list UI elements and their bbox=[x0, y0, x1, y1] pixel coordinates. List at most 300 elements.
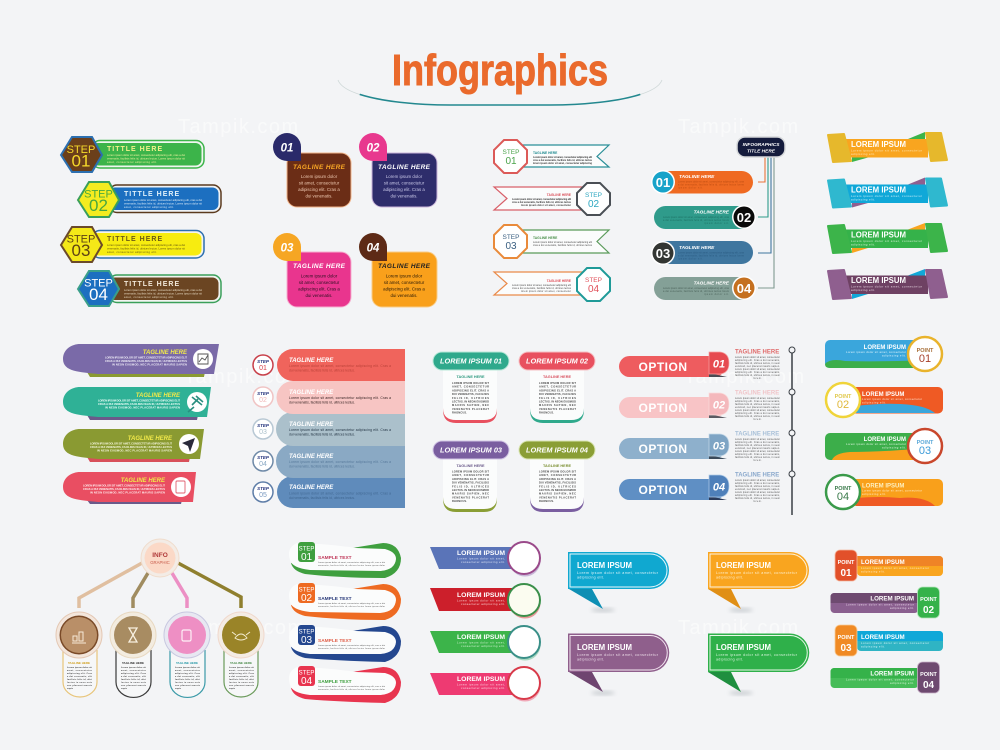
point 04: LOREM IPSUM bbox=[862, 484, 904, 490]
tagline bar red: LOREM IPSUM DOLOR SIT AMET, CONSECTETUR ADIPISCING ELIT bbox=[83, 484, 165, 488]
text card 04: LECTUS. IN NEON EUISMOD bbox=[539, 488, 576, 492]
option 01: adipiscing elit. Cras a dui venenatis, bbox=[735, 371, 780, 374]
row 05: 05 bbox=[259, 492, 267, 499]
option 03: TAGLINE HERE bbox=[735, 432, 779, 438]
tab 03: Lorem ipsum dolor sit amet, consectetur bbox=[861, 641, 929, 645]
text card 02: TAGLINE HERE bbox=[543, 375, 571, 379]
pill 03: Lorem ipsum dolor sit amet, consectetur adipiscing elit, cras bbox=[678, 252, 745, 254]
tagline bar teal: TAGLINE HERE bbox=[136, 393, 181, 399]
swoosh 04 bbox=[289, 666, 401, 703]
point 01: adipiscing elit. bbox=[882, 354, 906, 358]
callout blue: adipiscing elit. bbox=[577, 576, 604, 580]
point 04: 04 bbox=[837, 491, 849, 503]
callout green: LOREM IPSUM bbox=[716, 643, 771, 652]
text card 03 bbox=[433, 441, 509, 512]
point 04: adipiscing elit. bbox=[862, 492, 886, 496]
option 01: facilisis felis id, ultrices lectus, in neon bbox=[735, 374, 781, 377]
row 02: 02 bbox=[259, 397, 267, 404]
option 02: adipiscing elit. Cras a dui venenatis, bbox=[735, 400, 780, 403]
card 01: 01 bbox=[281, 142, 293, 154]
ribbon 01: cras a dui venenatis, facilisis felis id, ultrices lectus bbox=[533, 159, 593, 162]
tab 04 bbox=[830, 662, 940, 693]
tagline bar purple: IN NEON EUISMOD, NEC PLACERAT MAURIS SAPIEN bbox=[112, 362, 187, 366]
ribbon circle 3 bbox=[430, 626, 540, 660]
tree card 2: TAGLINE HERE bbox=[122, 661, 144, 665]
row 02: dui venenatis, facilisis felis id, ultrices lectus. bbox=[289, 400, 355, 404]
point 03: 03 bbox=[919, 445, 931, 457]
pill 02: ipsum dolor sit. bbox=[704, 222, 729, 225]
title pill bbox=[737, 137, 785, 157]
step 02: STEP bbox=[84, 188, 113, 200]
ribbon 01 bbox=[494, 140, 609, 173]
ribbon circle 1: LOREM IPSUM bbox=[457, 550, 505, 557]
card 04: dui venenatis. bbox=[390, 293, 418, 298]
ribbon 01: 01 bbox=[505, 156, 517, 167]
tab 01: POINT bbox=[838, 560, 855, 566]
text card 01: DUI VENENATIS, FACILISIS bbox=[452, 392, 489, 396]
pill 03: ipsum dolor sit. bbox=[678, 258, 703, 260]
ribbon 03: Lorem ipsum dolor sit amet, consectetur adipiscing elit bbox=[533, 241, 592, 244]
row 01: Lorem ipsum dolor sit amet, consectetur adipiscing elit. Cras a bbox=[289, 364, 391, 368]
tab 04: LOREM IPSUM bbox=[870, 670, 914, 678]
connectors bbox=[79, 563, 241, 608]
tree card 1: a dui venenatis, elit bbox=[67, 675, 92, 678]
card 02: TAGLINE HERE bbox=[378, 164, 431, 171]
option 04: lorem. bbox=[753, 500, 762, 503]
card 02: adipiscing elit. Cras a bbox=[383, 187, 425, 192]
step 01: amet, consectetur adipiscing elit. bbox=[107, 160, 157, 164]
card 04: adipiscing elit. Cras a bbox=[383, 286, 425, 292]
option 03: 03 bbox=[713, 440, 725, 452]
pill 04: TAGLINE HERE bbox=[694, 280, 730, 286]
swoosh 04: 04 bbox=[301, 676, 312, 687]
row 04: STEP bbox=[257, 455, 270, 460]
tagline bar teal: CRAS A DUI VENENATIS, FACILISIS FELIS ID, ULTRICES LECTUS bbox=[98, 402, 180, 406]
option 02: Lorem ipsum dolor sit amet, consectetur bbox=[735, 409, 780, 412]
point 01: LOREM IPSUM bbox=[864, 345, 906, 351]
pill 02: a dui venenatis, facilisis felis id, ultrices lectus lorem bbox=[663, 219, 729, 222]
text card 04: TAGLINE HERE bbox=[543, 464, 571, 468]
step 01: 01 bbox=[72, 152, 90, 170]
swoosh 02: venenatis, facilisis felis id, ultrices lectus lorem ipsum dolor bbox=[318, 605, 385, 608]
pill 03: 03 bbox=[656, 246, 670, 261]
row 01: STEP bbox=[257, 359, 270, 364]
point 03 bbox=[825, 429, 942, 463]
text card 01: AMET, CONSECTETUR bbox=[452, 385, 489, 389]
point 01 bbox=[825, 337, 942, 371]
ribbon 03 bbox=[494, 225, 609, 258]
pill 02: 02 bbox=[737, 210, 751, 225]
option 03: facilisis felis id, ultrices lectus, in neon bbox=[735, 456, 781, 459]
tree card 4: facilisis felis id, ultri bbox=[229, 678, 254, 681]
option 01: TAGLINE HERE bbox=[735, 350, 779, 356]
card 04: TAGLINE HERE bbox=[378, 263, 431, 270]
option 03: Lorem ipsum dolor sit amet, consectetur bbox=[735, 438, 780, 441]
tree card 4: lectus in neon euis bbox=[229, 681, 255, 684]
point 02: Lorem ipsum dolor sit amet, consectetur bbox=[862, 397, 922, 401]
pill 02: TAGLINE HERE bbox=[694, 210, 730, 216]
step 01 bbox=[61, 137, 204, 172]
row 01: 01 bbox=[259, 365, 267, 372]
row 01: dui venenatis, facilisis felis id, ultrices lectus. bbox=[289, 368, 355, 372]
ribbon 03: 03 bbox=[505, 241, 517, 252]
tab 03: adipiscing elit. bbox=[861, 644, 885, 648]
pill 01: 01 bbox=[656, 175, 670, 190]
timeline axis bbox=[789, 347, 795, 515]
tree card 3: nec placerat mauris bbox=[175, 684, 201, 687]
text card 02: DUI VENENATIS, FACILISIS bbox=[539, 392, 576, 396]
ribbon 01: TAGLINE HERE bbox=[533, 151, 558, 155]
step 01: Lorem ipsum dolor sit amet, consectetur adipiscing elit, cras a dui bbox=[107, 153, 185, 157]
tree card 1: amet, consectetur bbox=[67, 669, 92, 672]
step 04: TITTLE HERE bbox=[124, 281, 180, 288]
row 05: TAGLINE HERE bbox=[289, 485, 334, 491]
option 02: facilisis felis id, ultrices lectus, in neon bbox=[735, 403, 781, 406]
pill 01: ipsum dolor sit. bbox=[678, 186, 703, 190]
pill 01: a dui venenatis, facilisis felis id, ultrices lectus lorem bbox=[678, 184, 744, 186]
tab 01: 01 bbox=[840, 568, 852, 579]
ribbon circle 4 bbox=[430, 667, 540, 702]
tagline bar olive: IN NEON EUISMOD, NEC PLACERAT MAURIS SAPIEN bbox=[97, 448, 172, 452]
tree card 4: amet, consectetur bbox=[229, 669, 254, 672]
banner 1 bbox=[828, 132, 947, 162]
point 01: POINT bbox=[917, 348, 934, 354]
panel: stacked steps bbox=[253, 349, 405, 508]
swoosh 03: 03 bbox=[301, 635, 312, 646]
card 04: 04 bbox=[367, 242, 380, 254]
text card 02: FELIS ID, ULTRICES bbox=[539, 396, 576, 400]
banner 3: LOREM IPSUM bbox=[851, 230, 906, 240]
step 03: STEP bbox=[67, 234, 95, 246]
banner 1: adipiscing elit. bbox=[851, 152, 875, 156]
tree card 1: sapie bbox=[67, 688, 74, 690]
ribbon 04: lorem ipsum dolor sit amet, consectetur bbox=[521, 290, 571, 293]
step 04: venenatis, facilisis felis id, ultrices lectus. Lorem ipsum dolor sit bbox=[124, 292, 202, 296]
text card 02: VENENATIS PLACERAT bbox=[539, 407, 576, 411]
panel: tagline cards bbox=[273, 133, 437, 307]
pill 04: 04 bbox=[737, 281, 752, 296]
text card 03: VENENATIS PLACERAT bbox=[452, 495, 489, 499]
ribbon circle 1: Lorem ipsum dolor sit amet, bbox=[457, 556, 505, 560]
card 02: dui venenatis. bbox=[390, 194, 418, 198]
text card 04: DUI VENENATIS, FACILISIS bbox=[539, 481, 576, 485]
panel: speech callouts bbox=[568, 552, 809, 695]
step 02: Lorem ipsum dolor sit amet, consectetur adipiscing elit, cras a dui bbox=[124, 198, 202, 202]
tab 01 bbox=[835, 550, 943, 581]
pill 04: ipsum dolor sit. bbox=[704, 293, 729, 296]
option 04: facilisis felis id, ultrices lectus, in neon bbox=[735, 485, 781, 488]
row 05: STEP bbox=[257, 486, 270, 491]
pill 03: TAGLINE HERE bbox=[679, 245, 715, 251]
tab 01: LOREM IPSUM bbox=[861, 559, 905, 566]
text card 01: MAURIS SAPIEN, NEC bbox=[452, 403, 489, 407]
ribbon circle 2 bbox=[430, 584, 540, 618]
tagline bar purple: LOREM IPSUM DOLOR SIT AMET, CONSECTETUR ADIPISCING ELIT bbox=[105, 356, 187, 360]
tree card 2: nec placerat mauris bbox=[121, 684, 147, 687]
point 03: adipiscing elit. bbox=[882, 446, 906, 450]
watermarks bbox=[178, 116, 806, 639]
option 03: adipiscing elit. Cras a dui venenatis, bbox=[735, 441, 780, 444]
tree card 2: adipiscing elit. Cras bbox=[121, 672, 147, 675]
tree card 2: facilisis felis id, ultri bbox=[121, 678, 146, 681]
pill 03 bbox=[651, 241, 753, 265]
card 04 bbox=[359, 233, 437, 307]
step 01: TITTLE HERE bbox=[107, 146, 163, 153]
card 02: Lorem ipsum dolor bbox=[386, 174, 423, 179]
banner 4 bbox=[828, 269, 947, 299]
row 04: Lorem ipsum dolor sit amet, consectetur adipiscing elit. Cras a bbox=[289, 460, 391, 464]
title bbox=[338, 46, 662, 105]
swoosh 02: 02 bbox=[301, 593, 312, 604]
card 01: dui venenatis. bbox=[305, 194, 333, 198]
card 03: sit amet, consectetur bbox=[299, 280, 340, 285]
tagline bar teal: LOREM IPSUM DOLOR SIT AMET, CONSECTETUR ADIPISCING ELIT bbox=[98, 398, 180, 402]
panel: lorem ipsum text cards bbox=[433, 352, 595, 512]
text card 04: LOREM IPSUM DOLOR SIT bbox=[539, 470, 576, 474]
row 01 bbox=[253, 349, 405, 381]
option 01: 01 bbox=[713, 358, 725, 370]
tree card 2: sapie bbox=[121, 688, 128, 690]
point 03: Lorem ipsum dolor sit amet, consectetur bbox=[846, 442, 906, 446]
option 04: euismod, nec placerat mauris sapien. bbox=[735, 488, 780, 491]
row 05 bbox=[253, 476, 405, 508]
step 01: venenatis, facilisis felis id, ultrices lectus. Lorem ipsum dolor sit bbox=[107, 156, 185, 160]
tree card 3: Lorem ipsum dolor sit bbox=[175, 666, 200, 669]
step 03 bbox=[61, 227, 204, 262]
tree card 3: amet, consectetur bbox=[175, 669, 200, 672]
card 01 bbox=[273, 133, 351, 207]
callout blue bbox=[568, 552, 669, 612]
panel: option timeline bbox=[619, 347, 795, 515]
tree card 1: lectus in neon euis bbox=[67, 681, 93, 684]
card 02 bbox=[359, 133, 437, 207]
panel: ribbon circles bbox=[430, 542, 540, 702]
text card 03: LOREM IPSUM 03 bbox=[440, 448, 502, 454]
ribbon circle 2: Lorem ipsum dolor sit amet, bbox=[457, 598, 505, 602]
ribbon circle 2: consectetur adipiscing elit. bbox=[461, 602, 505, 606]
callout purple bbox=[568, 634, 669, 695]
option 02: 02 bbox=[713, 400, 725, 412]
tree card 1: nec placerat mauris bbox=[67, 684, 93, 687]
callout blue: LOREM IPSUM bbox=[577, 561, 632, 570]
text card 04 bbox=[519, 441, 595, 512]
text card 02: AMET, CONSECTETUR bbox=[539, 385, 576, 389]
card 01: Lorem ipsum dolor bbox=[301, 174, 338, 179]
point 01: Lorem ipsum dolor sit amet, consectetur bbox=[846, 350, 906, 354]
option 03 bbox=[619, 432, 781, 462]
tab 01: Lorem ipsum dolor sit amet, consectetur bbox=[861, 566, 929, 570]
callout orange: LOREM IPSUM bbox=[716, 561, 771, 570]
text card 02: MAURIS SAPIEN, NEC bbox=[539, 403, 576, 407]
row 03: dui venenatis, facilisis felis id, ultrices lectus. bbox=[289, 432, 355, 436]
watermarks: Tampik.com bbox=[684, 366, 806, 388]
row 05: Lorem ipsum dolor sit amet, consectetur adipiscing elit. Cras a bbox=[289, 492, 391, 496]
pill 01: TAGLINE HERE bbox=[679, 174, 715, 180]
banner 2 bbox=[828, 178, 947, 208]
tab 02 bbox=[830, 587, 940, 618]
step 03: Lorem ipsum dolor sit amet, consectetur adipiscing elit, cras a dui bbox=[107, 243, 185, 247]
callout orange bbox=[708, 552, 809, 612]
watermarks: Tampik.com bbox=[178, 116, 300, 138]
row 04: dui venenatis, facilisis felis id, ultrices lectus. bbox=[289, 464, 355, 468]
ribbon circle 3: consectetur adipiscing elit. bbox=[461, 644, 505, 648]
text card 04: VENENATIS PLACERAT bbox=[539, 495, 576, 499]
panel: twisted banners bbox=[828, 132, 947, 299]
banner 4: Lorem ipsum dolor sit amet, consectetur bbox=[851, 284, 922, 288]
banner 2: adipiscing elit. bbox=[851, 198, 875, 202]
option 04 bbox=[619, 472, 781, 503]
text card 01: RHONCUS. bbox=[452, 411, 467, 415]
option 04: adipiscing elit. Cras a dui venenatis, bbox=[735, 494, 780, 497]
text card 01: ADIPISCING ELIT. CRAS A bbox=[452, 388, 489, 392]
tagline bar red: CRAS A DUI VENENATIS, FACILISIS FELIS ID, ULTRICES LECTUS bbox=[83, 487, 165, 491]
step 02 bbox=[78, 182, 221, 217]
option 02: adipiscing elit. Cras a dui venenatis, bbox=[735, 412, 780, 415]
tab 02: 02 bbox=[923, 605, 934, 616]
ribbon 02: Lorem ipsum dolor sit amet, consectetur adipiscing elit bbox=[512, 198, 571, 201]
banner 2: Lorem ipsum dolor sit amet, consectetur bbox=[851, 194, 922, 198]
swoosh 03: STEP bbox=[299, 630, 314, 636]
row 03: Lorem ipsum dolor sit amet, consectetur adipiscing elit. Cras a bbox=[289, 428, 391, 432]
swoosh 01: venenatis, facilisis felis id, ultrices lectus lorem ipsum dolor bbox=[318, 564, 385, 567]
option 02: facilisis felis id, ultrices lectus, in neon bbox=[735, 415, 781, 418]
watermarks: Tampik.com bbox=[678, 617, 800, 639]
text card 02 bbox=[519, 352, 595, 423]
option 02: Lorem ipsum dolor sit amet, consectetur bbox=[735, 397, 780, 400]
text card 03: RHONCUS. bbox=[452, 499, 467, 503]
ribbon circle 1: consectetur adipiscing elit. bbox=[461, 560, 505, 564]
text card 01: LOREM IPSUM DOLOR SIT bbox=[452, 381, 489, 385]
ribbon circle 1 bbox=[430, 542, 540, 576]
step 03: venenatis, facilisis felis id, ultrices lectus. Lorem ipsum dolor sit bbox=[107, 246, 185, 250]
row 01: TAGLINE HERE bbox=[289, 358, 334, 364]
tagline bar teal bbox=[63, 387, 211, 420]
tagline bar red: TAGLINE HERE bbox=[121, 478, 166, 484]
point 02: adipiscing elit. bbox=[862, 400, 886, 404]
tree card 3: TAGLINE HERE bbox=[176, 661, 198, 665]
tree card 2: Lorem ipsum dolor sit bbox=[121, 666, 146, 669]
option 01: lorem. bbox=[753, 377, 762, 380]
tree card 3: a dui venenatis, elit bbox=[175, 675, 200, 678]
text card 04: LOREM IPSUM 04 bbox=[526, 448, 588, 454]
callout purple: adipiscing elit. bbox=[577, 658, 604, 662]
panel: icon taglines bbox=[63, 344, 219, 504]
pill 02: Lorem ipsum dolor sit amet, consectetur adipiscing elit, cras bbox=[663, 216, 730, 219]
row 03 bbox=[253, 412, 405, 446]
point 02: LOREM IPSUM bbox=[862, 392, 904, 398]
text card 04: MAURIS SAPIEN, NEC bbox=[539, 492, 576, 496]
card 01: sit amet, consectetur bbox=[299, 180, 340, 186]
text card 02: LECTUS. IN NEON EUISMOD bbox=[539, 400, 576, 404]
tab 03: 03 bbox=[840, 643, 852, 654]
option 01: Lorem ipsum dolor sit amet, consectetur bbox=[735, 368, 780, 371]
swoosh 04: Lorem ipsum dolor sit amet, consectetur adipiscing elit, cras a dui bbox=[318, 685, 386, 688]
ribbon 04 bbox=[494, 268, 610, 301]
connector lines bbox=[758, 157, 774, 288]
tree card 2: lectus in neon euis bbox=[121, 681, 147, 684]
banner 4: adipiscing elit. bbox=[851, 288, 875, 292]
ribbon circle 3: LOREM IPSUM bbox=[457, 634, 505, 641]
card 03: TAGLINE HERE bbox=[293, 263, 346, 270]
step 04: STEP bbox=[84, 278, 113, 290]
tree card 4: adipiscing elit. Cras bbox=[229, 672, 255, 675]
card 01: TAGLINE HERE bbox=[293, 164, 346, 171]
tab 04: Lorem ipsum dolor sit amet, consectetur bbox=[846, 678, 914, 682]
step 03: 03 bbox=[72, 241, 90, 260]
pill 01 bbox=[651, 170, 753, 194]
ribbon 01: lorem ipsum dolor sit amet, consectetur adipiscing bbox=[533, 162, 593, 165]
swoosh 01: SAMPLE TEXT bbox=[318, 555, 352, 561]
card 01: adipiscing elit. Cras a bbox=[298, 187, 340, 192]
option 03: Lorem ipsum dolor sit amet, consectetur bbox=[735, 450, 780, 453]
info hub: GRAPHIC bbox=[150, 560, 170, 565]
text card 01: TAGLINE HERE bbox=[456, 375, 485, 379]
panel: point tabs bbox=[830, 550, 943, 693]
option 04: 04 bbox=[713, 482, 725, 494]
tagline bar olive: CRAS A DUI VENENATIS, FACILISIS FELIS ID, ULTRICES LECTUS bbox=[90, 445, 172, 449]
row 03: 03 bbox=[259, 429, 267, 436]
tree card 4: TAGLINE HERE bbox=[230, 661, 252, 665]
option 02: lorem. bbox=[753, 418, 762, 421]
watermarks: Tampik.com bbox=[184, 617, 306, 639]
text card 03: ADIPISCING ELIT. CRAS A bbox=[452, 477, 489, 481]
tab 03 bbox=[835, 625, 943, 656]
info hub bbox=[141, 539, 179, 577]
row 04 bbox=[253, 444, 405, 478]
point 04: Lorem ipsum dolor sit amet, consectetur bbox=[862, 488, 922, 492]
swoosh 04: SAMPLE TEXT bbox=[318, 679, 352, 685]
option 04: facilisis felis id, ultrices lectus, in neon bbox=[735, 497, 781, 500]
callout purple: LOREM IPSUM bbox=[577, 643, 632, 652]
text card 01: FELIS ID, ULTRICES bbox=[452, 396, 489, 400]
step 01: STEP bbox=[67, 144, 95, 156]
text card 01: LECTUS. IN NEON EUISMOD bbox=[452, 400, 489, 404]
tab 02: POINT bbox=[920, 597, 938, 603]
ribbon 04: STEP bbox=[585, 277, 602, 284]
row 03: STEP bbox=[257, 423, 270, 428]
point 03: LOREM IPSUM bbox=[864, 437, 906, 443]
option 01: OPTION bbox=[638, 360, 688, 374]
option 03: adipiscing elit. Cras a dui venenatis, bbox=[735, 453, 780, 456]
ribbon 02: TAGLINE HERE bbox=[547, 193, 572, 197]
row 03: TAGLINE HERE bbox=[289, 422, 334, 428]
title: Infographics bbox=[392, 46, 608, 95]
text card 03: MAURIS SAPIEN, NEC bbox=[452, 492, 489, 496]
tree card 3 bbox=[164, 612, 210, 697]
card 02: sit amet, consectetur bbox=[384, 180, 425, 186]
card 02: 02 bbox=[367, 142, 380, 154]
banner 1: Lorem ipsum dolor sit amet, consectetur bbox=[851, 148, 922, 152]
text card 04: FELIS ID, ULTRICES bbox=[539, 484, 576, 488]
text card 04: ADIPISCING ELIT. CRAS A bbox=[539, 477, 576, 481]
tree card 3: sapie bbox=[175, 688, 182, 690]
step 02: 02 bbox=[89, 196, 108, 215]
tree card 4: sapie bbox=[229, 688, 236, 690]
point 03: POINT bbox=[917, 440, 934, 446]
panel: point wave bars bbox=[825, 337, 943, 509]
option 04: OPTION bbox=[638, 483, 688, 497]
option 02: euismod, nec placerat mauris sapien. bbox=[735, 406, 780, 409]
point 04 bbox=[826, 475, 943, 509]
tree card 4: a dui venenatis, elit bbox=[229, 675, 254, 678]
ribbon 02: cras a dui venenatis, facilisis felis id, ultrices lectus bbox=[512, 201, 572, 204]
pill 04: a dui venenatis, facilisis felis id, ultrices lectus lorem bbox=[663, 290, 729, 293]
ribbon circle 4: Lorem ipsum dolor sit amet, bbox=[457, 682, 505, 686]
text card 01: LOREM IPSUM 01 bbox=[440, 358, 502, 366]
text card 04: RHONCUS. bbox=[539, 499, 554, 503]
option 03: lorem. bbox=[753, 459, 762, 462]
card 04: Lorem ipsum dolor bbox=[386, 274, 423, 278]
